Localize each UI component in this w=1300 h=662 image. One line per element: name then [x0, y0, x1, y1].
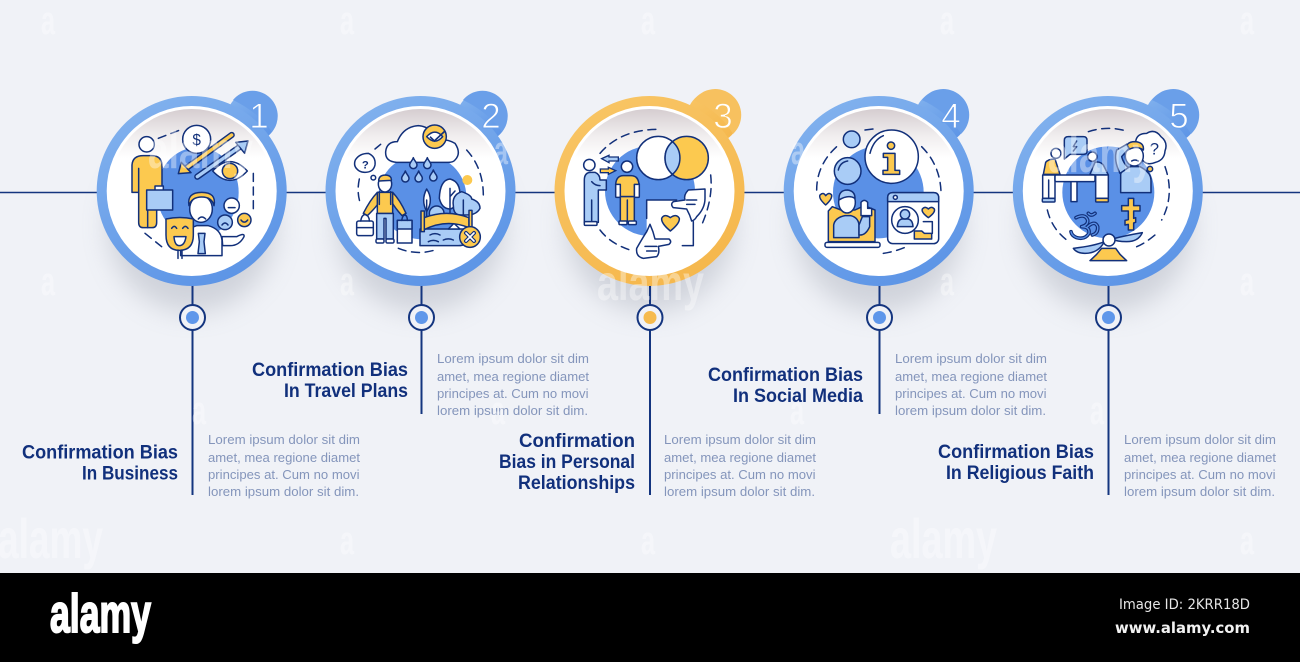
- body text 4: principes at. Cum no movi: [895, 386, 1047, 401]
- watermarks: a: [1240, 519, 1254, 563]
- heading 3: Relationships: [518, 473, 635, 494]
- panel: step 5 religious faith: [938, 89, 1276, 499]
- number badge 1: [227, 92, 277, 142]
- watermarks: a: [790, 389, 804, 433]
- number badge overlay 4: [922, 89, 969, 134]
- watermarks: a: [940, 0, 954, 43]
- icon: businessman, money and masks: [132, 125, 253, 258]
- watermarks: a: [494, 129, 508, 173]
- number badge overlay 1: [233, 91, 278, 132]
- ring 2: [326, 96, 516, 286]
- heading 2: Confirmation Bias: [252, 360, 408, 381]
- number badge 5: [1145, 91, 1197, 143]
- watermarks: alamy: [0, 507, 103, 570]
- number badge overlay 3: [694, 89, 741, 134]
- number badge overlay 5: [1152, 89, 1199, 134]
- heading 1: In Business: [82, 464, 178, 484]
- icon: traveller, rain and bridge: ?: [362, 159, 369, 171]
- watermarks: a: [1240, 260, 1254, 304]
- icon: streamer, info bubbles and profile window: [817, 129, 941, 253]
- number badge 4: [915, 91, 967, 143]
- body text 4: amet, mea regione diamet: [895, 369, 1047, 384]
- body text 5: amet, mea regione diamet: [1124, 450, 1276, 465]
- body text 5: Lorem ipsum dolor sit dim: [1124, 432, 1276, 447]
- watermarks: alamy: [890, 507, 997, 570]
- number 3: 3: [713, 97, 733, 136]
- number 2: 2: [481, 97, 501, 136]
- watermarks: alamy: [1048, 126, 1153, 184]
- watermarks: alamy: [597, 255, 704, 311]
- panel: step 1 business: [22, 91, 360, 499]
- icon: people, venn diagram and framed heart: [584, 129, 711, 258]
- body text 3: [664, 432, 816, 499]
- body text 5: principes at. Cum no movi: [1124, 467, 1276, 482]
- body text 1: lorem ipsum dolor sit dim.: [208, 484, 359, 499]
- heading 2: In Travel Plans: [284, 381, 408, 402]
- body text 2: amet, mea regione diamet: [437, 369, 589, 384]
- body text 5: lorem ipsum dolor sit dim.: [1124, 484, 1275, 499]
- body text 2: Lorem ipsum dolor sit dim: [437, 351, 589, 366]
- watermarks: a: [491, 389, 505, 433]
- number 4: 4: [941, 97, 961, 136]
- icon: debate, thinker and religious symbols: [1042, 128, 1169, 261]
- number badge 3: [687, 91, 739, 143]
- marker dot 4: [867, 305, 892, 330]
- body text 3: Lorem ipsum dolor sit dim: [664, 432, 816, 447]
- body text 3: principes at. Cum no movi: [664, 467, 816, 482]
- heading 1: Confirmation Bias: [22, 442, 178, 464]
- marker dot 1: [180, 305, 205, 330]
- marker dot 3: [638, 305, 662, 330]
- watermarks: a: [1090, 389, 1104, 433]
- marker dot 2: [409, 305, 434, 330]
- number 1: 1: [249, 97, 269, 136]
- footer url: www.alamy.com: [1115, 619, 1250, 637]
- ring 1: [97, 96, 287, 286]
- heading 2: [252, 360, 408, 402]
- panel: step 3 relationships: [499, 89, 816, 499]
- heading 1: [22, 442, 178, 484]
- timeline axis: [0, 192, 1300, 194]
- ring 3: [554, 96, 744, 286]
- panel: step 4 social media: [708, 89, 1047, 418]
- icon: traveller, rain and bridge: [355, 125, 483, 252]
- body text 1: Lorem ipsum dolor sit dim: [208, 432, 360, 447]
- icon: businessman, money and masks: $: [192, 132, 201, 149]
- watermarks: a: [641, 0, 655, 43]
- panel: step 2 travel: [252, 91, 589, 418]
- footer image id: Image ID: 2KRR18D: [1119, 597, 1250, 613]
- body text 4: Lorem ipsum dolor sit dim: [895, 351, 1047, 366]
- heading 4: Confirmation Bias: [708, 365, 863, 386]
- watermarks: a: [1240, 0, 1254, 43]
- number badge overlay 2: [463, 91, 508, 132]
- body text 3: amet, mea regione diamet: [664, 450, 816, 465]
- body text 4: lorem ipsum dolor sit dim.: [895, 403, 1046, 418]
- body text 5: [1124, 432, 1276, 499]
- body text 2: principes at. Cum no movi: [437, 386, 589, 401]
- marker dot 5: [1096, 305, 1121, 330]
- heading 4: [708, 365, 863, 407]
- watermarks: a: [791, 129, 805, 173]
- body text 2: lorem ipsum dolor sit dim.: [437, 403, 588, 418]
- body text 1: principes at. Cum no movi: [208, 467, 360, 482]
- watermarks: a: [641, 519, 655, 563]
- footer logo: alamy: [50, 584, 151, 644]
- ring 4: [784, 96, 974, 286]
- heading 3: Bias in Personal: [499, 452, 635, 473]
- body text 3: lorem ipsum dolor sit dim.: [664, 484, 815, 499]
- watermarks: a: [41, 0, 55, 43]
- number 5: 5: [1169, 97, 1189, 136]
- watermarks: a: [940, 260, 954, 304]
- number badge 2: [457, 92, 507, 142]
- heading 3: Confirmation: [519, 431, 635, 452]
- body text 1: amet, mea regione diamet: [208, 450, 360, 465]
- watermarks: a: [340, 0, 354, 43]
- heading 3: [499, 431, 635, 494]
- heading 5: In Religious Faith: [946, 463, 1094, 484]
- watermarks: a: [192, 389, 206, 433]
- icon: debate, thinker and religious symbols: ?: [1150, 139, 1159, 158]
- heading 5: [938, 442, 1094, 484]
- watermarks: alamy: [148, 122, 253, 180]
- ring 5: [1013, 96, 1203, 286]
- body text 1: [208, 432, 360, 499]
- watermarks: a: [340, 519, 354, 563]
- body text 2: [437, 351, 589, 418]
- watermarks: a: [41, 260, 55, 304]
- footer band: [0, 573, 1300, 662]
- heading 4: In Social Media: [733, 386, 863, 407]
- watermarks: a: [340, 260, 354, 304]
- heading 5: Confirmation Bias: [938, 442, 1094, 463]
- body text 4: [895, 351, 1047, 418]
